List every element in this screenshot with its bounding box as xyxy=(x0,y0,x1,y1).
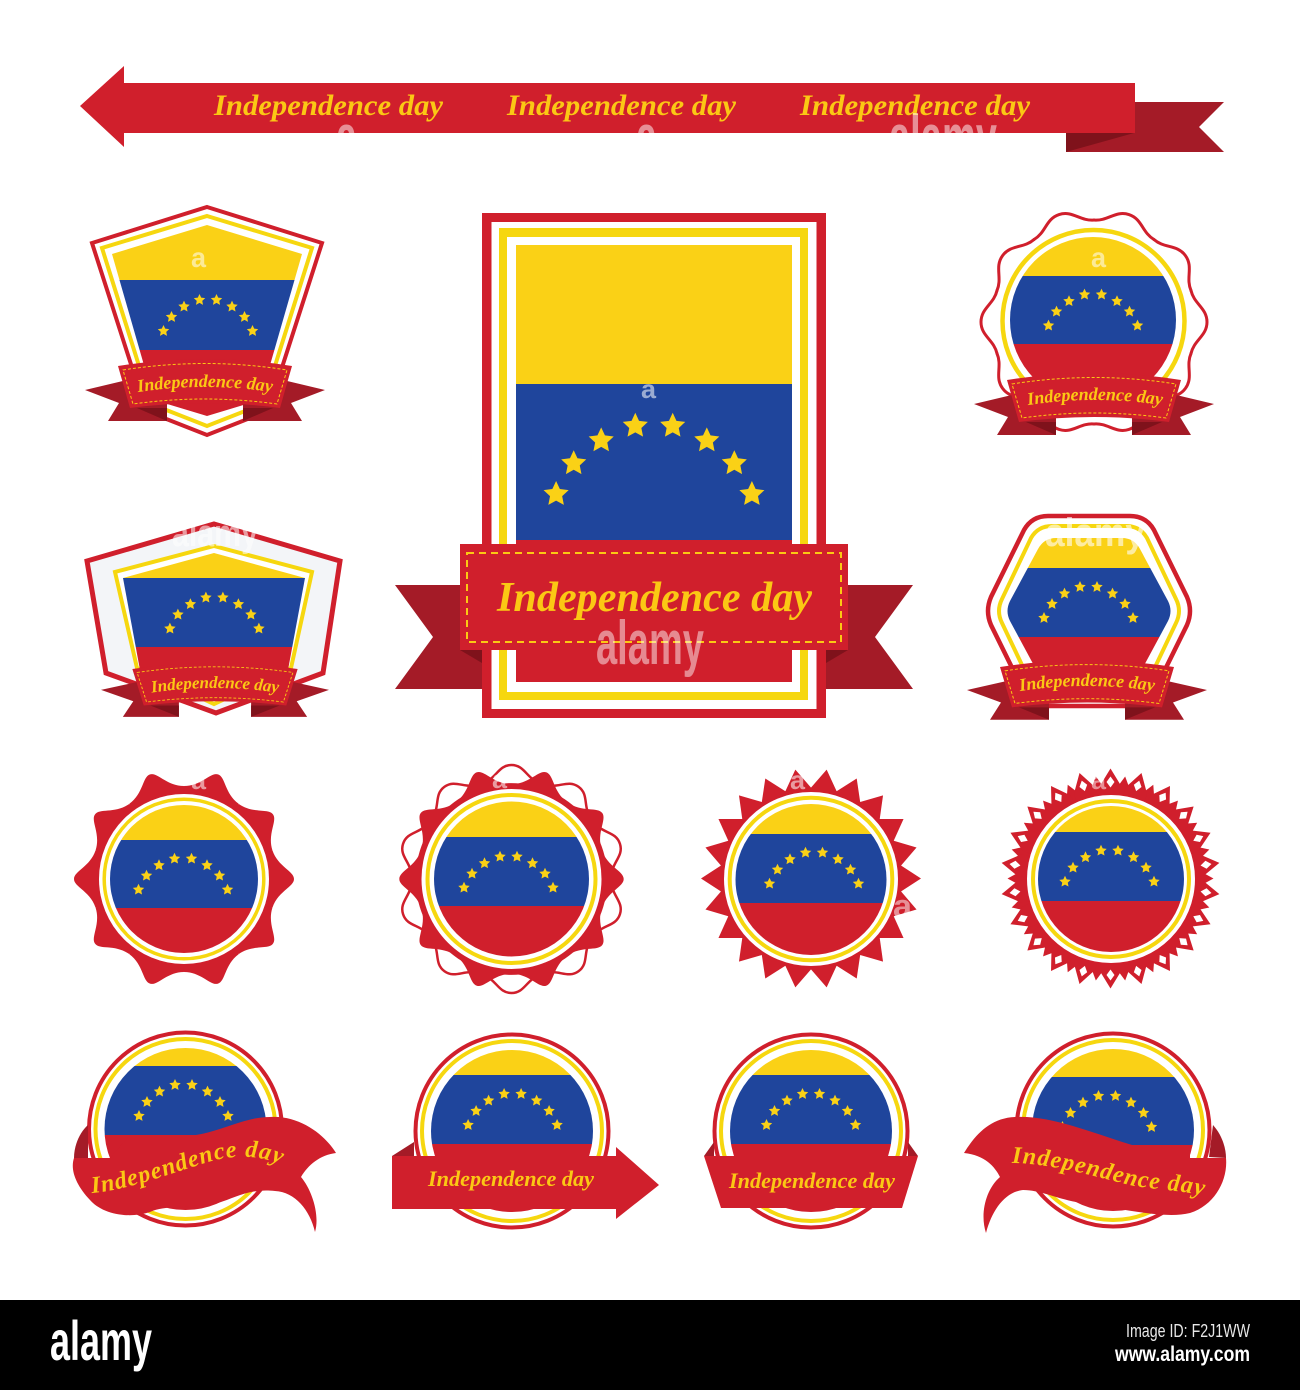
badge: filled wavy seal xyxy=(74,765,294,992)
ribbon text: Independence day xyxy=(427,1166,594,1191)
banner text 3: Independence day xyxy=(799,89,1031,122)
badge: round with wavy ribbon right xyxy=(72,1030,336,1232)
watermark: alamy xyxy=(172,513,258,555)
banner watermark letter 1: a xyxy=(336,103,357,172)
badge: round with wavy ribbon left xyxy=(964,1032,1226,1233)
watermark: a xyxy=(1091,765,1107,795)
central ribbon band xyxy=(460,544,848,650)
ribbon text: Independence day xyxy=(1012,1147,1206,1198)
watermark: a xyxy=(1091,242,1106,273)
badge: seal with outline loops xyxy=(394,763,630,995)
image id: Image ID: F2J1WW xyxy=(1126,1321,1250,1341)
footer bar xyxy=(0,1300,1300,1390)
ribbon text: Independence day xyxy=(92,1140,284,1194)
badge: rounded hexagon right xyxy=(967,511,1207,720)
badge: 22-point star seal xyxy=(701,765,921,989)
banner watermark letter 2: a xyxy=(636,103,657,172)
badge: wide shield left xyxy=(84,513,343,717)
central watermark: alamy xyxy=(596,609,704,678)
badge: wavy outline top right xyxy=(974,212,1214,435)
watermark: alamy xyxy=(1045,511,1146,555)
banner text 1: Independence day xyxy=(213,89,444,122)
central ribbon text: Independence day xyxy=(496,575,812,621)
badge: perforated star seal xyxy=(1000,765,1221,988)
watermark: a xyxy=(191,242,206,273)
watermark: a xyxy=(191,765,207,795)
badge: shield top left xyxy=(85,204,325,438)
ribbon tails xyxy=(395,585,913,689)
watermark: a xyxy=(492,764,508,794)
top arrow banner xyxy=(80,66,1224,172)
website: www.alamy.com xyxy=(1114,1343,1250,1366)
ribbon text: Independence day xyxy=(1020,674,1156,694)
watermark 2: a xyxy=(893,888,912,924)
card frame xyxy=(482,213,826,718)
ribbon text: Independence day xyxy=(152,676,280,696)
large flag xyxy=(516,245,792,682)
banner watermark: alamy xyxy=(889,103,997,172)
flag watermark letter: a xyxy=(641,374,657,404)
watermark 1: a xyxy=(790,765,806,795)
panel: central flag card xyxy=(395,213,913,718)
ribbon text: Independence day xyxy=(138,374,274,395)
ribbon text: Independence day xyxy=(1028,388,1164,408)
banner text 2: Independence day xyxy=(506,89,737,122)
badge: round with straight ribbon xyxy=(704,1034,918,1228)
footer logo: alamy xyxy=(50,1309,152,1372)
ribbon text: Independence day xyxy=(728,1168,895,1193)
badge: round with arrow ribbon xyxy=(392,1034,659,1228)
